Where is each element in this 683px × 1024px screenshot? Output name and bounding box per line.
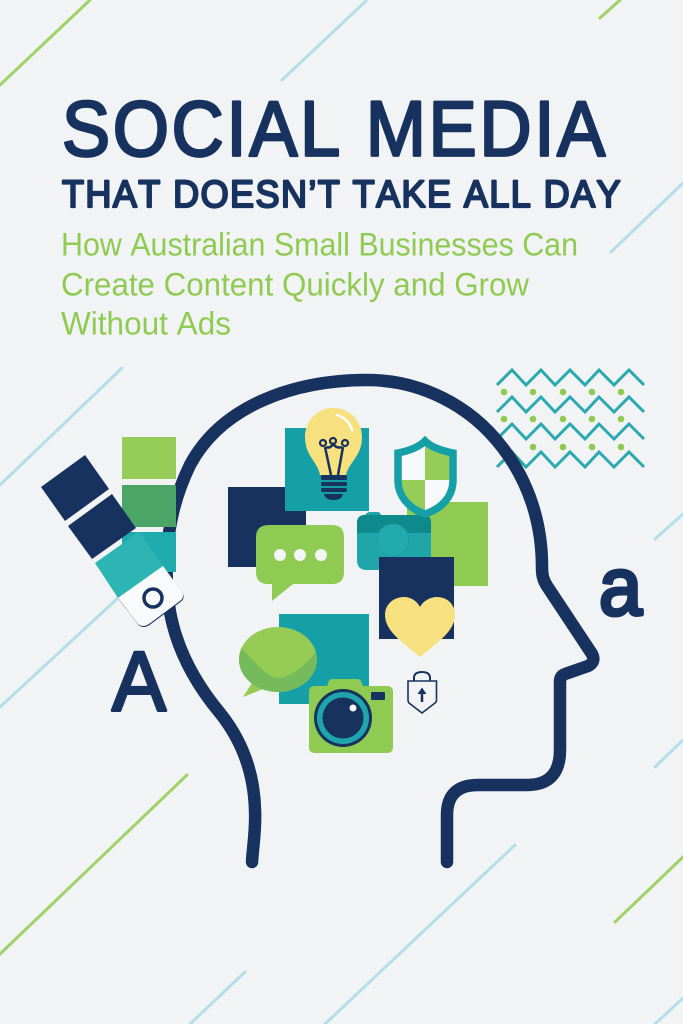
icon: oval speech bubble <box>239 627 317 697</box>
navy square behind heart <box>379 557 454 639</box>
icon: heart <box>385 597 455 657</box>
green tagline: Create Content Quickly and Grow <box>61 266 530 302</box>
teal square behind bulb <box>285 428 369 511</box>
icon: light bulb <box>305 408 362 500</box>
colour swatch fan <box>41 437 184 627</box>
navy square <box>228 487 306 567</box>
subtitle heading: THAT DOESN’T TAKE ALL DAY <box>62 174 622 216</box>
letter A: A <box>112 634 166 728</box>
green square <box>407 502 488 586</box>
icon: green camera <box>309 679 393 753</box>
green tagline: How Australian Small Businesses Can <box>61 226 578 262</box>
icon: teal camera <box>357 512 431 570</box>
letter a: a <box>599 542 642 632</box>
head outline <box>167 380 593 862</box>
icon: padlock <box>408 672 436 713</box>
green tagline: Without Ads <box>61 306 231 342</box>
teal square lower <box>279 614 369 704</box>
green tagline <box>61 226 578 342</box>
icon: speech bubble with dots <box>256 525 344 601</box>
zigzag pattern <box>497 370 644 467</box>
icon: shield <box>398 441 453 514</box>
title: SOCIAL MEDIA <box>62 87 608 173</box>
